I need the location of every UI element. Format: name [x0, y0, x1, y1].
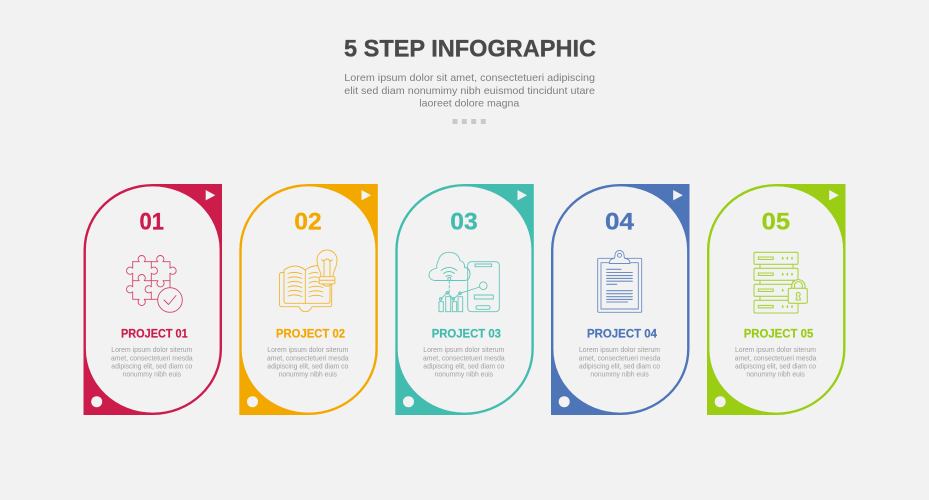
intro text block: elit sed diam nonumimy nibh euismod tincidunt utare: [344, 85, 595, 97]
body text 02: nonummy nibh euis: [279, 370, 337, 379]
panel frame 02: [239, 184, 378, 415]
body text 05: Lorem ipsum dolor siterum: [735, 345, 816, 354]
icon: open book with light bulb: [280, 250, 337, 312]
panel frame 04: [551, 184, 690, 415]
panel frame 01: [84, 184, 222, 415]
icon: cloud, phone and chart: [429, 252, 499, 312]
heading: project 01: PROJECT 01: [121, 328, 188, 340]
body text 04: nonummy nibh euis: [590, 370, 649, 379]
number 05: 05: [762, 208, 790, 235]
heading: project 04: PROJECT 04: [587, 328, 658, 340]
body text 05: nonummy nibh euis: [746, 370, 805, 379]
body text 01: adipiscing elit, sed diam co: [111, 362, 192, 370]
panel: project 03: [395, 184, 534, 415]
number 04: 04: [605, 208, 635, 235]
intro text block: Lorem ipsum dolor sit amet, consectetueri adipiscing: [344, 72, 595, 84]
body text 02: amet, consectetueri mesda: [267, 353, 349, 362]
body text 01: nonummy nibh euis: [123, 370, 181, 379]
panel: project 05: [707, 184, 846, 415]
panel: project 02: [239, 184, 378, 415]
icon: clipboard: [598, 250, 642, 312]
panel frame 05: [707, 184, 846, 415]
title ornament: four dots: [452, 119, 486, 124]
body text 03: nonummy nibh euis: [435, 370, 493, 379]
heading: project 05: PROJECT 05: [744, 328, 814, 340]
body text 04: Lorem ipsum dolor siterum: [579, 345, 660, 354]
number 03: 03: [450, 208, 478, 235]
icon: puzzle with check: [127, 256, 182, 312]
body text 05: adipiscing elit, sed diam co: [735, 362, 816, 370]
heading: project 03: PROJECT 03: [432, 328, 501, 340]
number 02: 02: [294, 208, 322, 235]
intro text block: laoreet dolore magna: [419, 98, 519, 110]
body text 01: Lorem ipsum dolor siterum: [111, 345, 192, 354]
body text 02: adipiscing elit, sed diam co: [267, 362, 348, 370]
body text 05: amet, consectetueri mesda: [735, 353, 816, 362]
panel: project 04: [551, 184, 690, 415]
body text 04: adipiscing elit, sed diam co: [579, 362, 660, 370]
body text 05: [735, 345, 816, 379]
body text 03: Lorem ipsum dolor siterum: [423, 345, 504, 354]
heading: project 02: PROJECT 02: [276, 328, 345, 340]
body text 02: Lorem ipsum dolor siterum: [267, 345, 348, 354]
icon: server rack with padlock: [754, 252, 807, 313]
body text 02: [267, 345, 349, 379]
body text 04: [579, 345, 660, 379]
body text 03: [423, 345, 505, 379]
panel frame 03: [395, 184, 534, 415]
body text 03: amet, consectetueri mesda: [423, 353, 505, 362]
intro text block: [344, 72, 595, 110]
body text 03: adipiscing elit, sed diam co: [423, 362, 504, 370]
title: 5 STEP INFOGRAPHIC: [344, 36, 596, 62]
panel: project 01: [84, 184, 222, 415]
body text 04: amet, consectetueri mesda: [579, 353, 660, 362]
number 01: 01: [140, 208, 164, 235]
body text 01: amet, consectetueri mesda: [111, 353, 193, 362]
body text 01: [111, 345, 193, 379]
